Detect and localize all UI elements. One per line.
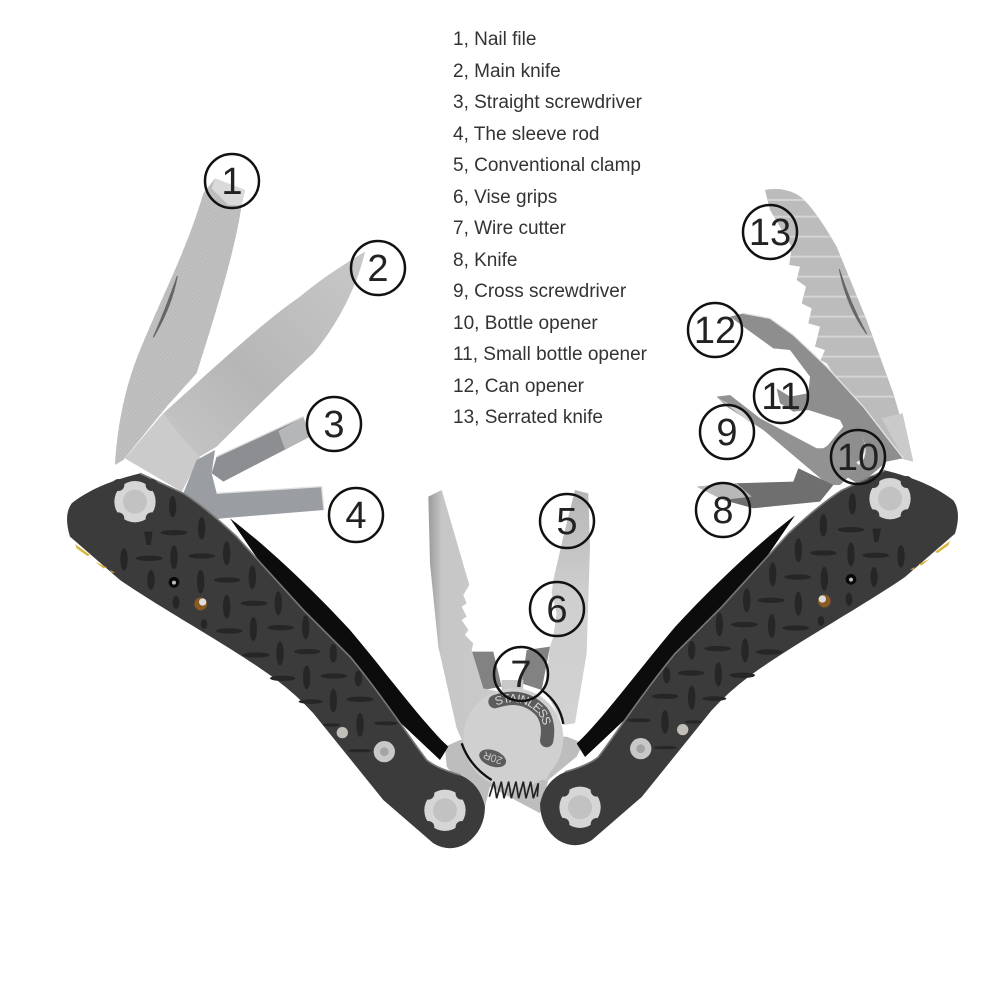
callout 10: 10 <box>837 437 879 479</box>
callout 13 <box>743 205 797 259</box>
20R plate: 20R <box>481 748 504 766</box>
stainless text: STAINLESS <box>495 694 550 725</box>
parts list: 11, Small bottle opener <box>453 344 647 365</box>
parts list: 12, Can opener <box>453 376 584 396</box>
callout 7: 7 <box>510 654 532 696</box>
straight screwdriver tool <box>212 417 310 482</box>
parts list: 6, Vise grips <box>453 186 557 208</box>
parts list: 2, Main knife <box>453 60 561 82</box>
left jaw <box>428 490 563 780</box>
callout 6 <box>530 582 584 636</box>
callout 1: 1 <box>221 161 243 203</box>
spring <box>489 782 538 798</box>
callout 3 <box>307 397 361 451</box>
callout 11 <box>754 369 808 423</box>
callout 5: 5 <box>556 501 578 543</box>
parts list: 3, Straight screwdriver <box>453 92 642 113</box>
pliers <box>428 490 590 814</box>
pivot disc <box>463 688 563 788</box>
cross screwdriver tool <box>717 395 860 485</box>
callout 7 <box>494 647 548 701</box>
callout 9: 9 <box>716 412 738 454</box>
callout 6: 6 <box>546 589 568 631</box>
parts list: 9, Cross screwdriver <box>453 281 626 302</box>
sleeve rod tool <box>183 450 324 520</box>
callout 5 <box>540 494 594 548</box>
pliers base <box>445 737 583 813</box>
small knife blade <box>697 468 833 508</box>
callout 12 <box>688 303 742 357</box>
left handle <box>67 473 485 848</box>
parts list: 1, Nail file <box>453 29 536 50</box>
wire cutter blocks <box>472 647 550 690</box>
black pivot arcs <box>462 690 563 780</box>
callout 9 <box>700 405 754 459</box>
callout 3: 3 <box>323 404 345 446</box>
callout 4 <box>329 488 383 542</box>
parts list: 5, Conventional clamp <box>453 155 641 176</box>
right handle <box>540 470 958 845</box>
parts list: 8, Knife <box>453 250 517 270</box>
serrated knife blade <box>763 189 913 462</box>
stainless plate <box>495 698 548 741</box>
callout 4: 4 <box>345 495 367 537</box>
callout 10 <box>831 430 885 484</box>
callout 8 <box>696 483 750 537</box>
callout 13: 13 <box>749 212 791 254</box>
callout 2: 2 <box>367 248 389 290</box>
callout 11: 11 <box>761 376 801 418</box>
callout 1 <box>205 154 259 208</box>
parts list: 4, The sleeve rod <box>453 124 599 144</box>
parts list: 10, Bottle opener <box>453 312 598 334</box>
callout 12: 12 <box>694 310 736 352</box>
callout 8: 8 <box>712 490 734 532</box>
nail file blade <box>115 178 245 465</box>
parts list: 13, Serrated knife <box>453 407 603 428</box>
can opener and bottle openers <box>730 313 903 485</box>
callout 2 <box>351 241 405 295</box>
parts list: 7, Wire cutter <box>453 218 566 239</box>
20R plate <box>477 746 509 771</box>
right jaw <box>545 490 590 725</box>
main knife blade <box>125 252 365 492</box>
parts list <box>453 29 647 428</box>
